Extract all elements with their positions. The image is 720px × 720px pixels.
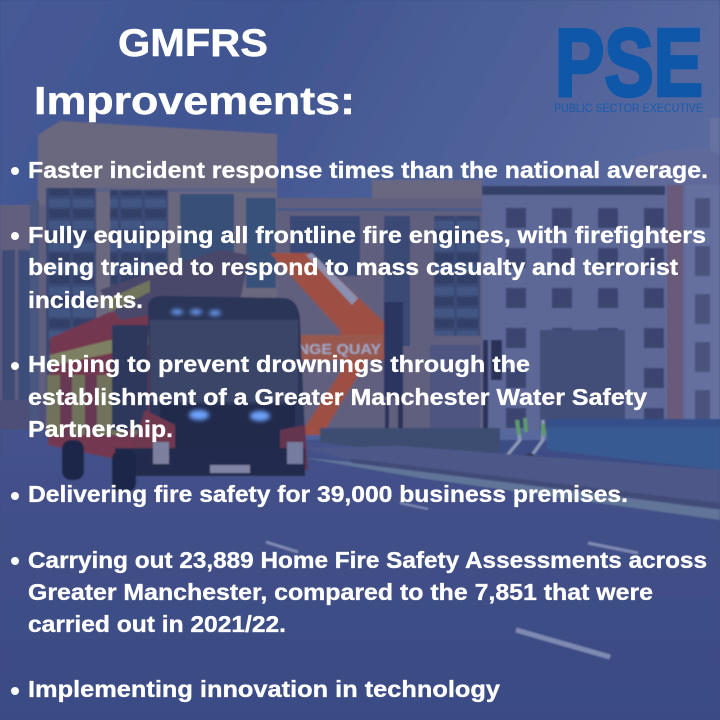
street poles and signals [384,302,502,465]
engine lower bumper [115,448,305,476]
bullet: home safety assessments [11,547,707,637]
bullet: fire engines: Fully equipping all frontline fire engines, with firefighters [28,222,706,248]
building: central apartment block [482,185,665,430]
bullet: home safety assessments: Greater Manchester, compared to the 7,851 that were [28,579,653,605]
fire engine [47,250,308,492]
title: GMFRS [118,22,268,65]
bullet: water safety: Partnership. [28,416,173,442]
bullet: fire engines: being trained to respond to mass casualty and terrorist [28,254,678,280]
blue emergency lights [171,310,270,421]
sign: orange chevron [270,253,395,435]
bullet: water safety [11,351,647,442]
bullet: home safety assessments: carried out in 2021/22. [28,611,286,637]
bridge railing [547,419,720,470]
engine cab [148,296,306,465]
logo: PSE: PUBLIC SECTOR EXECUTIVE [554,103,703,115]
bullet: innovation: Implementing innovation in technology [28,676,500,702]
title: Improvements: [34,80,355,123]
bullet: business premises: Delivering fire safety for 39,000 business premises. [28,481,628,507]
bullet: water safety: establishment of a Greater Manchester Water Safety [28,384,647,410]
engine wheels [62,440,84,480]
road surface [0,432,720,720]
pavement [305,446,720,512]
engine side body [48,310,160,462]
bullet: water safety: Helping to prevent drownings through the [28,351,530,377]
building: right apartment tower [630,118,720,425]
bullet list [11,157,708,702]
building: metro wing [277,180,482,430]
bullet: fire engines [11,222,706,313]
building: metro office main block [0,121,277,430]
foliage hedge [320,428,500,452]
sign: orange chevron: ANGE QUAY [286,341,381,358]
bullet: fire engines: incidents. [28,287,143,313]
green cycle lane [305,458,720,520]
kerb [349,458,720,509]
bullet: response times: Faster incident response times than the national average. [28,157,708,183]
bullet: home safety assessments: Carrying out 23,889 Home Fire Safety Assessments across [28,547,707,573]
road markings [266,503,638,657]
title [34,22,355,123]
sky [0,0,720,440]
scooters [505,418,544,465]
